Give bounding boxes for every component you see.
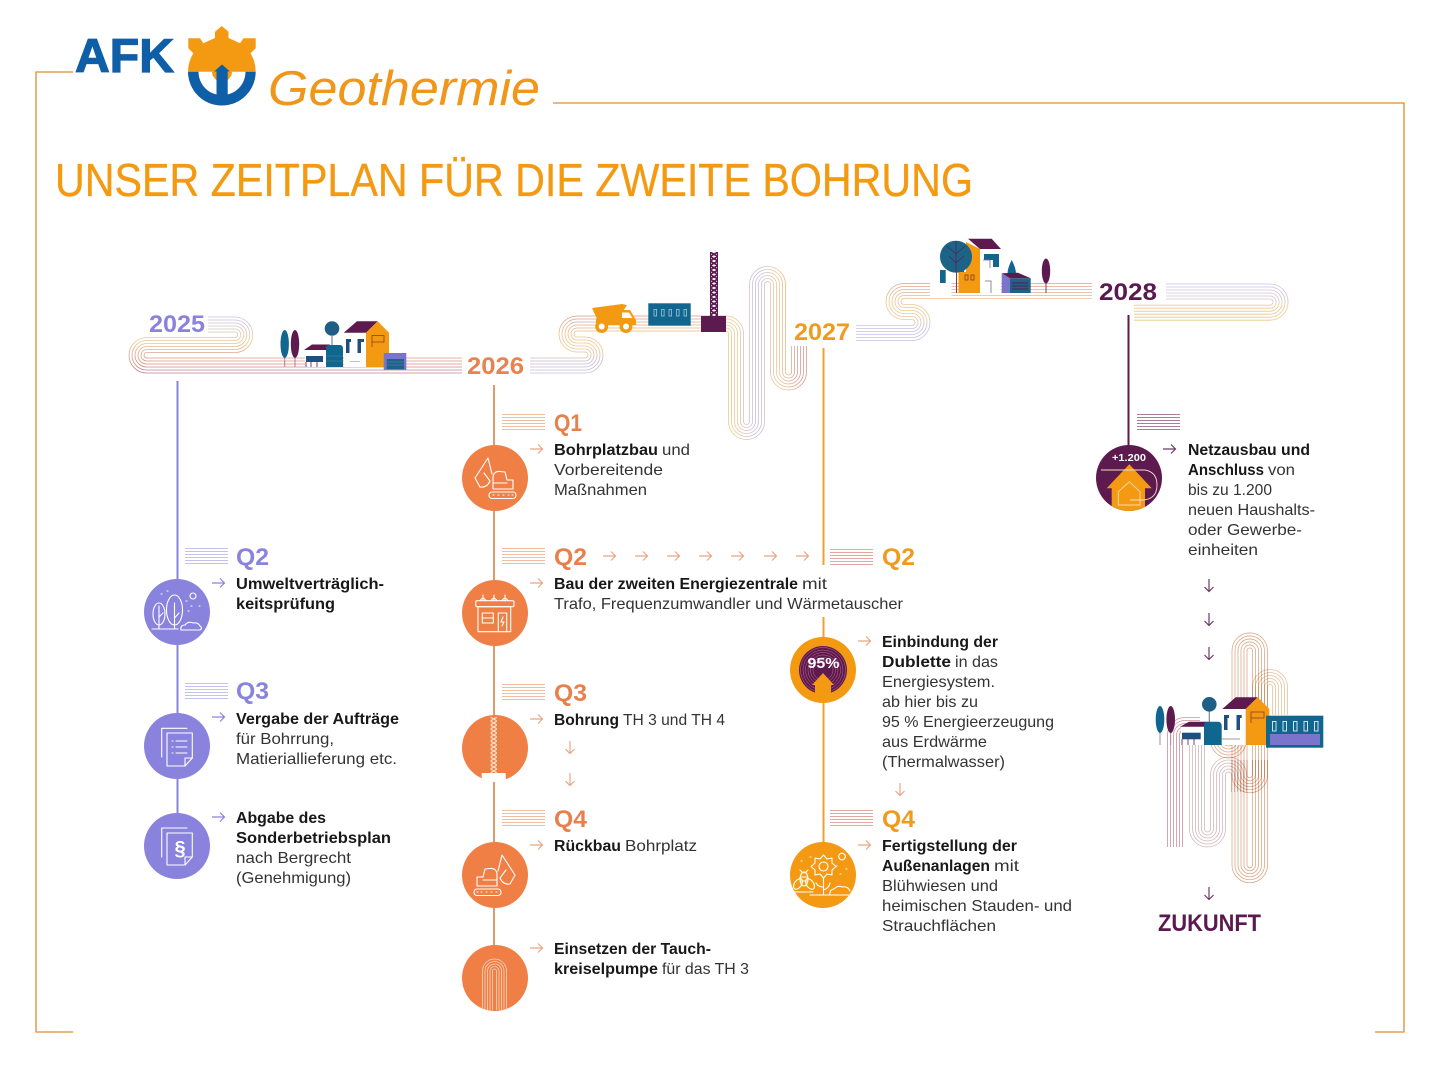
2026 Q2: Q2	[554, 544, 587, 571]
circle: section paragraph document: §	[174, 838, 186, 860]
text: Abgabe des Sonderbetriebsplan: Abgabe des	[236, 810, 326, 827]
year 2026: 2026	[467, 353, 524, 380]
text: Netzausbau und Anschluss: von	[1268, 462, 1295, 479]
2027 Q4: Q4	[882, 806, 916, 833]
text: Einbindung der Dublette: Einbindung der	[882, 634, 998, 651]
text: Fertigstellung der Außenanlagen: Außenanlagen	[882, 858, 990, 875]
text: Bau der zweiten Energiezentrale: mit	[802, 576, 828, 593]
text: Bohrplatzbau: und	[662, 442, 690, 459]
tall house	[965, 239, 1001, 293]
scene: village 2025	[280, 321, 406, 370]
text: Bohrung: TH 3 und TH 4	[623, 712, 725, 729]
year labels	[149, 279, 1157, 380]
circle: dismantling excavator	[462, 842, 528, 908]
logo emblem	[188, 26, 256, 106]
2026 Q4: Q4	[554, 806, 588, 833]
arrows: dark column	[1163, 444, 1214, 900]
tree	[940, 241, 980, 293]
circle: environment assessment	[144, 579, 210, 645]
text: Einsetzen der Tauchkreiselpumpe	[554, 941, 749, 978]
future illustration: ribbons and village	[1156, 640, 1323, 875]
timeline ribbon: 2025 to 2026	[136, 324, 462, 366]
text: Bohrplatzbau	[554, 442, 690, 499]
circle: 95 percent geothermal: 95%	[808, 656, 840, 672]
scene: houses 2028	[930, 239, 1050, 298]
text: Einbindung der Dublette: Dublette	[882, 654, 951, 671]
text: Bau der zweiten Energiezentrale: Bau der zweiten Energiezentrale	[554, 576, 798, 593]
text: Bohrung: Bohrung	[554, 712, 619, 729]
text: Einbindung der Dublette	[882, 634, 1054, 771]
label: Zukunft: ZUKUNFT	[1158, 910, 1261, 937]
timeline ribbon: 2026 to 2027 borehole loops	[726, 274, 799, 432]
arrows: purple column	[212, 578, 224, 822]
2025 Q2: Q2	[236, 544, 269, 571]
text: Bohrung	[554, 712, 725, 729]
arrows: orange column	[530, 444, 808, 952]
text: Vergabe der Aufträge: Matieriallieferung etc.	[236, 751, 397, 768]
timeline ribbon: 2026 to 2027 horizontal	[530, 324, 727, 366]
logo wordmark Geothermie: Geothermie	[268, 62, 540, 116]
circle: energy station	[462, 580, 528, 646]
title: UNSER ZEITPLAN FÜR DIE ZWEITE BOHRUNG	[55, 154, 973, 206]
timeline line: 2028	[1128, 315, 1130, 450]
text: Umweltverträglichkeitsprüfung: Umweltverträglich-	[236, 576, 384, 593]
text: Fertigstellung der Außenanlagen: Blühwiesen und	[882, 878, 998, 895]
text: Netzausbau und Anschluss: bis zu 1.200	[1188, 482, 1272, 499]
text: Netzausbau und Anschluss	[1188, 442, 1315, 559]
circle: 95 percent geothermal	[790, 637, 856, 703]
text: Abgabe des Sonderbetriebsplan: Sonderbetriebsplan	[236, 830, 391, 847]
text: Rückbau Bohrplatz	[554, 838, 697, 855]
2027 Q2: Q2	[882, 544, 915, 571]
text: Einbindung der Dublette: Energiesystem.	[882, 674, 995, 691]
text: Fertigstellung der Außenanlagen	[882, 838, 1072, 935]
arrows	[212, 444, 1214, 952]
text: Netzausbau und Anschluss: neuen Haushalts-	[1188, 502, 1315, 519]
circle: 1200 households	[1096, 445, 1162, 511]
circle: contract documents	[144, 713, 210, 779]
arrows: yellow column	[858, 636, 904, 850]
timeline line: 2026	[493, 385, 495, 980]
text: Netzausbau und Anschluss: Netzausbau und	[1188, 442, 1310, 459]
text: Rückbau Bohrplatz: Rückbau	[554, 838, 621, 855]
main house	[344, 321, 406, 370]
text: Einbindung der Dublette: in das	[955, 654, 998, 671]
small house with carport	[304, 321, 343, 367]
logo wordmark AFK: AFK	[75, 29, 174, 82]
text: Vergabe der Aufträge: Vergabe der Aufträge	[236, 711, 399, 728]
text: Bohrplatzbau: Maßnahmen	[554, 482, 647, 499]
year 2025: 2025	[149, 311, 205, 338]
circle: 1200 households: +1.200	[1112, 453, 1146, 464]
text: Bohrplatzbau: Bohrplatzbau	[554, 442, 658, 459]
circle: submersible pump	[462, 945, 528, 1011]
text: Einbindung der Dublette: 95 % Energieerzeugung	[882, 714, 1054, 731]
text: Einsetzen der Tauchkreiselpumpe: kreiselpumpe	[554, 961, 658, 978]
text: Rückbau Bohrplatz: Bohrplatz	[625, 838, 697, 855]
text: Einbindung der Dublette: ab hier bis zu	[882, 694, 978, 711]
text: Einsetzen der Tauchkreiselpumpe: Einsetzen der Tauch-	[554, 941, 711, 958]
2025 Q3: Q3	[236, 678, 269, 705]
text: Fertigstellung der Außenanlagen: mit	[994, 858, 1020, 875]
timeline ribbon: after 2028	[1134, 292, 1281, 313]
timeline ribbon: 2027 to 2028	[856, 291, 1092, 333]
2026 Q3: Q3	[554, 680, 587, 707]
text: Vergabe der Aufträge	[236, 711, 399, 768]
circle: landscaping	[790, 842, 856, 908]
text: Vergabe der Aufträge: für Bohrrung,	[236, 731, 334, 748]
text: Abgabe des Sonderbetriebsplan	[236, 810, 391, 887]
timeline line: 2027	[822, 348, 824, 875]
circle: excavator	[462, 445, 528, 511]
text: Einbindung der Dublette: aus Erdwärme	[882, 734, 987, 751]
dump truck	[592, 304, 636, 333]
trees	[280, 330, 299, 367]
text: Netzausbau und Anschluss: oder Gewerbe-	[1188, 522, 1302, 539]
container	[648, 303, 691, 326]
scene: truck, container and drilling rig	[592, 252, 726, 333]
quarter header stripes	[185, 414, 1180, 826]
drilling rig	[701, 252, 726, 332]
garage and trees	[1002, 258, 1050, 293]
trees	[1156, 706, 1175, 745]
hall building	[1266, 716, 1323, 748]
text: Einbindung der Dublette: (Thermalwasser)	[882, 754, 1005, 771]
text: Netzausbau und Anschluss: Anschluss	[1188, 462, 1264, 479]
text: Fertigstellung der Außenanlagen: Strauchflächen	[882, 918, 996, 935]
text: Fertigstellung der Außenanlagen: Fertigstellung der	[882, 838, 1017, 855]
text: Einsetzen der Tauchkreiselpumpe: für das TH 3	[662, 961, 749, 978]
text: Bau der zweiten Energiezentrale	[554, 576, 904, 613]
timeline line: 2025	[176, 381, 178, 845]
circle: section paragraph document	[144, 813, 210, 879]
text: Fertigstellung der Außenanlagen: heimischen Stauden- und	[882, 898, 1072, 915]
main house	[1222, 697, 1269, 745]
text: Netzausbau und Anschluss: einheiten	[1188, 542, 1258, 559]
small house	[1180, 697, 1222, 745]
text: Umweltverträglichkeitsprüfung: keitsprüfung	[236, 596, 335, 613]
text: Abgabe des Sonderbetriebsplan: nach Bergrecht	[236, 850, 352, 867]
logo: AFK Geothermie	[75, 26, 540, 116]
text: Abgabe des Sonderbetriebsplan: (Genehmigung)	[236, 870, 351, 887]
text: Umweltverträglichkeitsprüfung	[236, 576, 384, 613]
year 2027: 2027	[794, 319, 850, 346]
year 2028: 2028	[1099, 279, 1157, 306]
ribbon loops	[1175, 640, 1280, 875]
text: Bau der zweiten Energiezentrale: Trafo, Frequenzumwandler und Wärmetauscher	[554, 596, 904, 613]
text: Bohrplatzbau: Vorbereitende	[554, 462, 663, 479]
2026 Q1: Q1	[554, 410, 582, 437]
circle: drilling	[462, 715, 528, 785]
quarter labels	[236, 410, 916, 833]
